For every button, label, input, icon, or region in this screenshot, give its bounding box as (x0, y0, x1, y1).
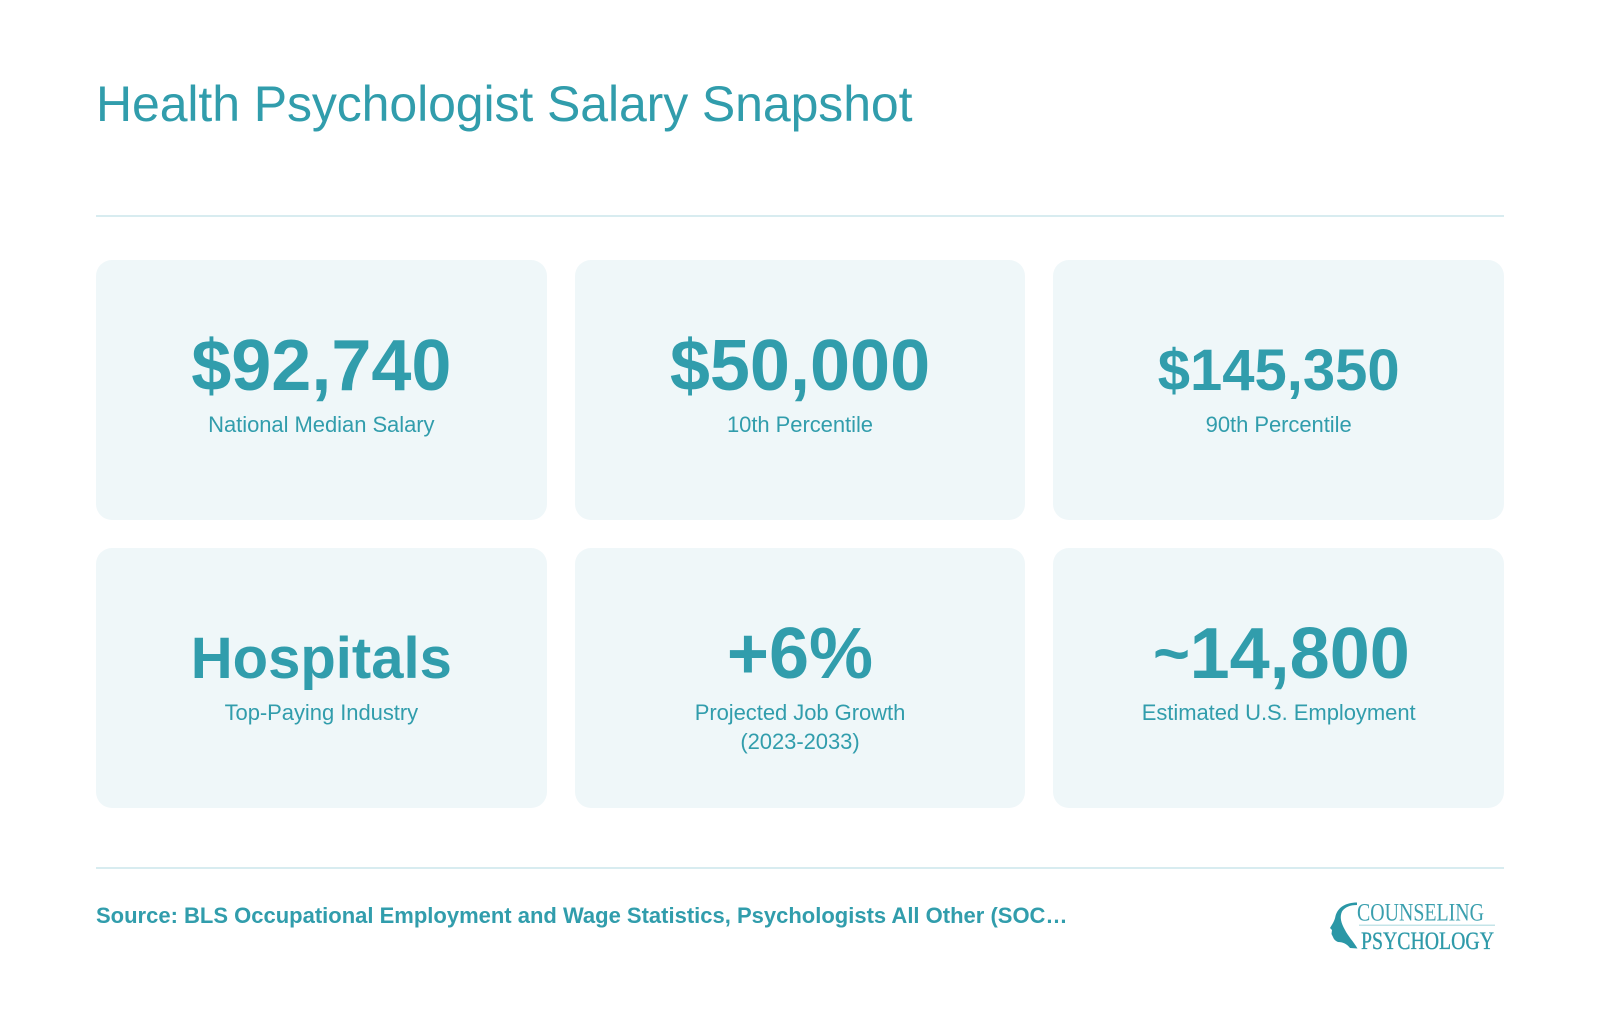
panel: 10th percentile (575, 260, 1025, 520)
panel: national median salary (96, 260, 547, 520)
panel: estimated employment (1053, 548, 1504, 808)
title: Health Psychologist Salary Snapshot (96, 76, 912, 132)
icon: head silhouette (1330, 902, 1358, 948)
panel: 90th percentile (1053, 260, 1504, 520)
stat value: +6% (727, 614, 873, 694)
stat label: (2023-2033) (740, 729, 860, 754)
logo wordmark (1357, 900, 1495, 955)
logo: counseling psychology (1330, 900, 1495, 955)
stat label: Projected Job Growth (695, 700, 905, 725)
stat value: $92,740 (191, 326, 451, 406)
stat label: 90th Percentile (1206, 412, 1352, 437)
stat label: 10th Percentile (727, 412, 873, 437)
stat label: National Median Salary (208, 412, 434, 437)
stat label: Estimated U.S. Employment (1142, 700, 1416, 725)
stat label (695, 700, 905, 754)
source note: Source: BLS Occupational Employment and Wage Statistics, Psychologists All Other (SOC… (96, 903, 1067, 928)
stat value: Hospitals (191, 626, 452, 691)
stat value: ~ (1153, 619, 1190, 689)
stat value: 14,800 (1190, 614, 1410, 694)
stat value: $145,350 (1158, 338, 1400, 403)
stat value: $50,000 (670, 326, 930, 406)
panel: projected job growth (575, 548, 1025, 808)
stat label: Top-Paying Industry (225, 700, 418, 725)
panel: top-paying industry (96, 548, 547, 808)
